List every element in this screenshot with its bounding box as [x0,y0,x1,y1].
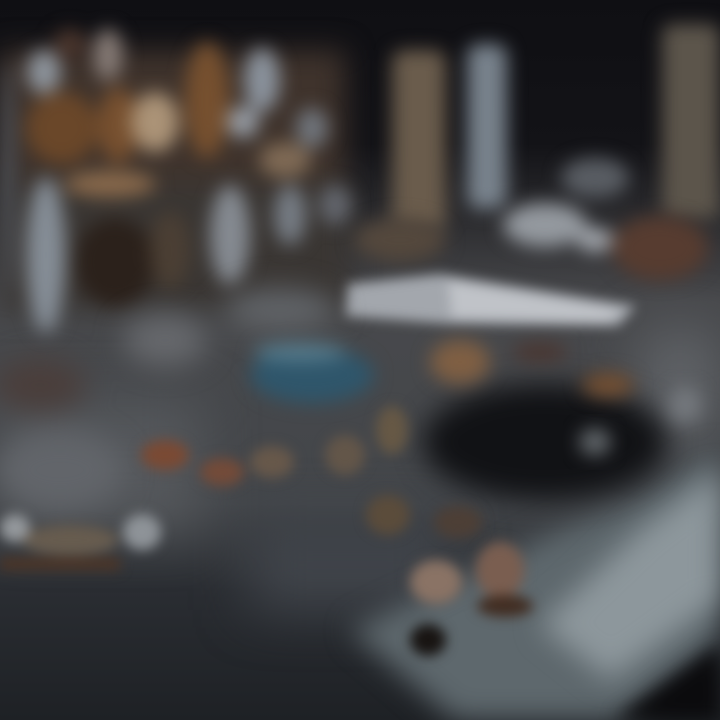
blue bowl [250,343,374,403]
black pot [423,384,701,500]
dark corner at lower right [615,645,720,720]
middle objects: grey glassware [0,288,336,510]
small orange and tan pills [141,406,482,538]
right side: white cloth and brown objects [354,158,708,280]
upper left shelf: bottles [0,29,351,333]
orange highlights above the pot [430,340,634,397]
lower left: white and tan objects [0,514,161,570]
foreground pills [410,542,533,656]
table: light reflective surface at lower right [350,450,720,720]
tall cylinders in the back [392,24,720,230]
white paper on table [345,274,636,326]
